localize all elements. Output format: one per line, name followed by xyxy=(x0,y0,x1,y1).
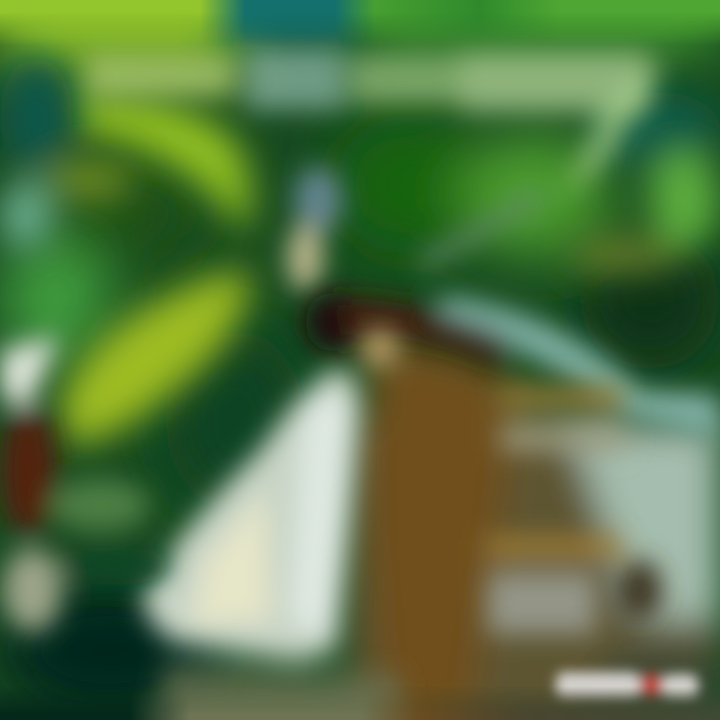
subject: left side brown fragment xyxy=(0,335,170,632)
subject: dark head and teal ridge xyxy=(305,292,720,440)
subject: brown body and pale side xyxy=(350,343,720,720)
subject: white wing xyxy=(143,368,400,720)
title: blurred heading text band xyxy=(85,48,670,195)
logo: blurred white mark bottom right xyxy=(556,672,698,700)
foliage: soft top edge colour strip xyxy=(0,0,720,46)
foliage: teal accents xyxy=(0,0,720,271)
subject: soft bottom edge colour strip xyxy=(0,686,720,720)
subject: blue grey wing tip xyxy=(287,166,540,292)
leaf: large lime leaf upper left xyxy=(60,95,252,445)
subject: body markings xyxy=(360,328,662,634)
